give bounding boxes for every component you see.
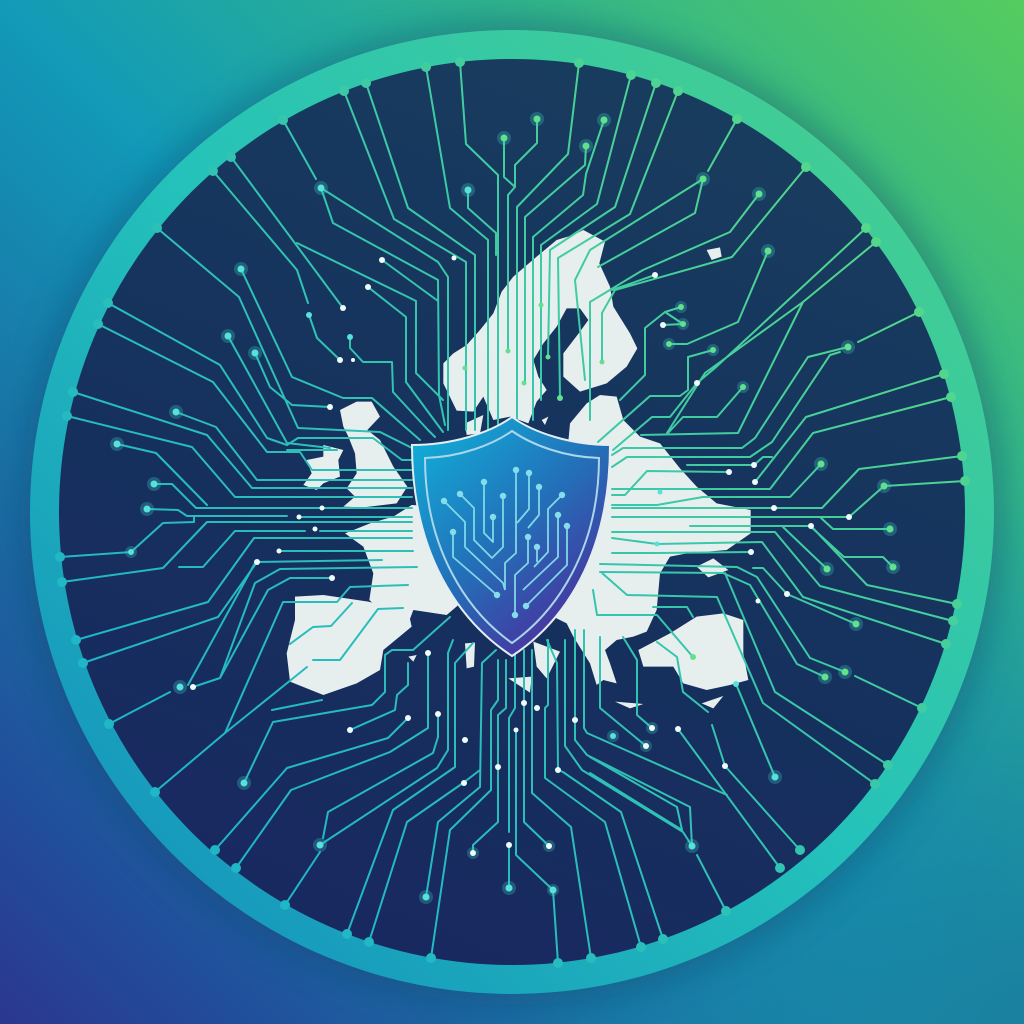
lower-right traces: [584, 564, 922, 868]
shield inner outline: [425, 431, 599, 643]
Central and Eastern Europe: [480, 395, 751, 685]
glowing circuit nodes: green cores: [462, 116, 896, 680]
islands and peninsulas: [408, 247, 728, 708]
left traces: [60, 228, 417, 687]
Ireland: [303, 445, 343, 490]
glowing circuit nodes: halos: [110, 112, 900, 904]
upper-right traces: [575, 119, 951, 489]
circuit traces: [60, 62, 965, 963]
bottom traces: [426, 630, 726, 963]
Scandinavia: [443, 230, 637, 423]
top traces: [213, 62, 678, 440]
ring terminal dots: [55, 57, 970, 968]
glowing circuit nodes: teal cores: [114, 184, 778, 900]
France: [345, 505, 480, 623]
Iberia: [287, 595, 412, 695]
Turkey: [638, 613, 748, 690]
map of Europe: [287, 230, 751, 708]
lower-left traces: [109, 585, 480, 942]
shield circuit tree: [441, 467, 570, 618]
right traces: [612, 456, 965, 644]
shield emblem: [412, 417, 610, 656]
white circuit nodes: [190, 256, 852, 856]
shield body: [412, 417, 610, 656]
United Kingdom: [340, 402, 407, 507]
